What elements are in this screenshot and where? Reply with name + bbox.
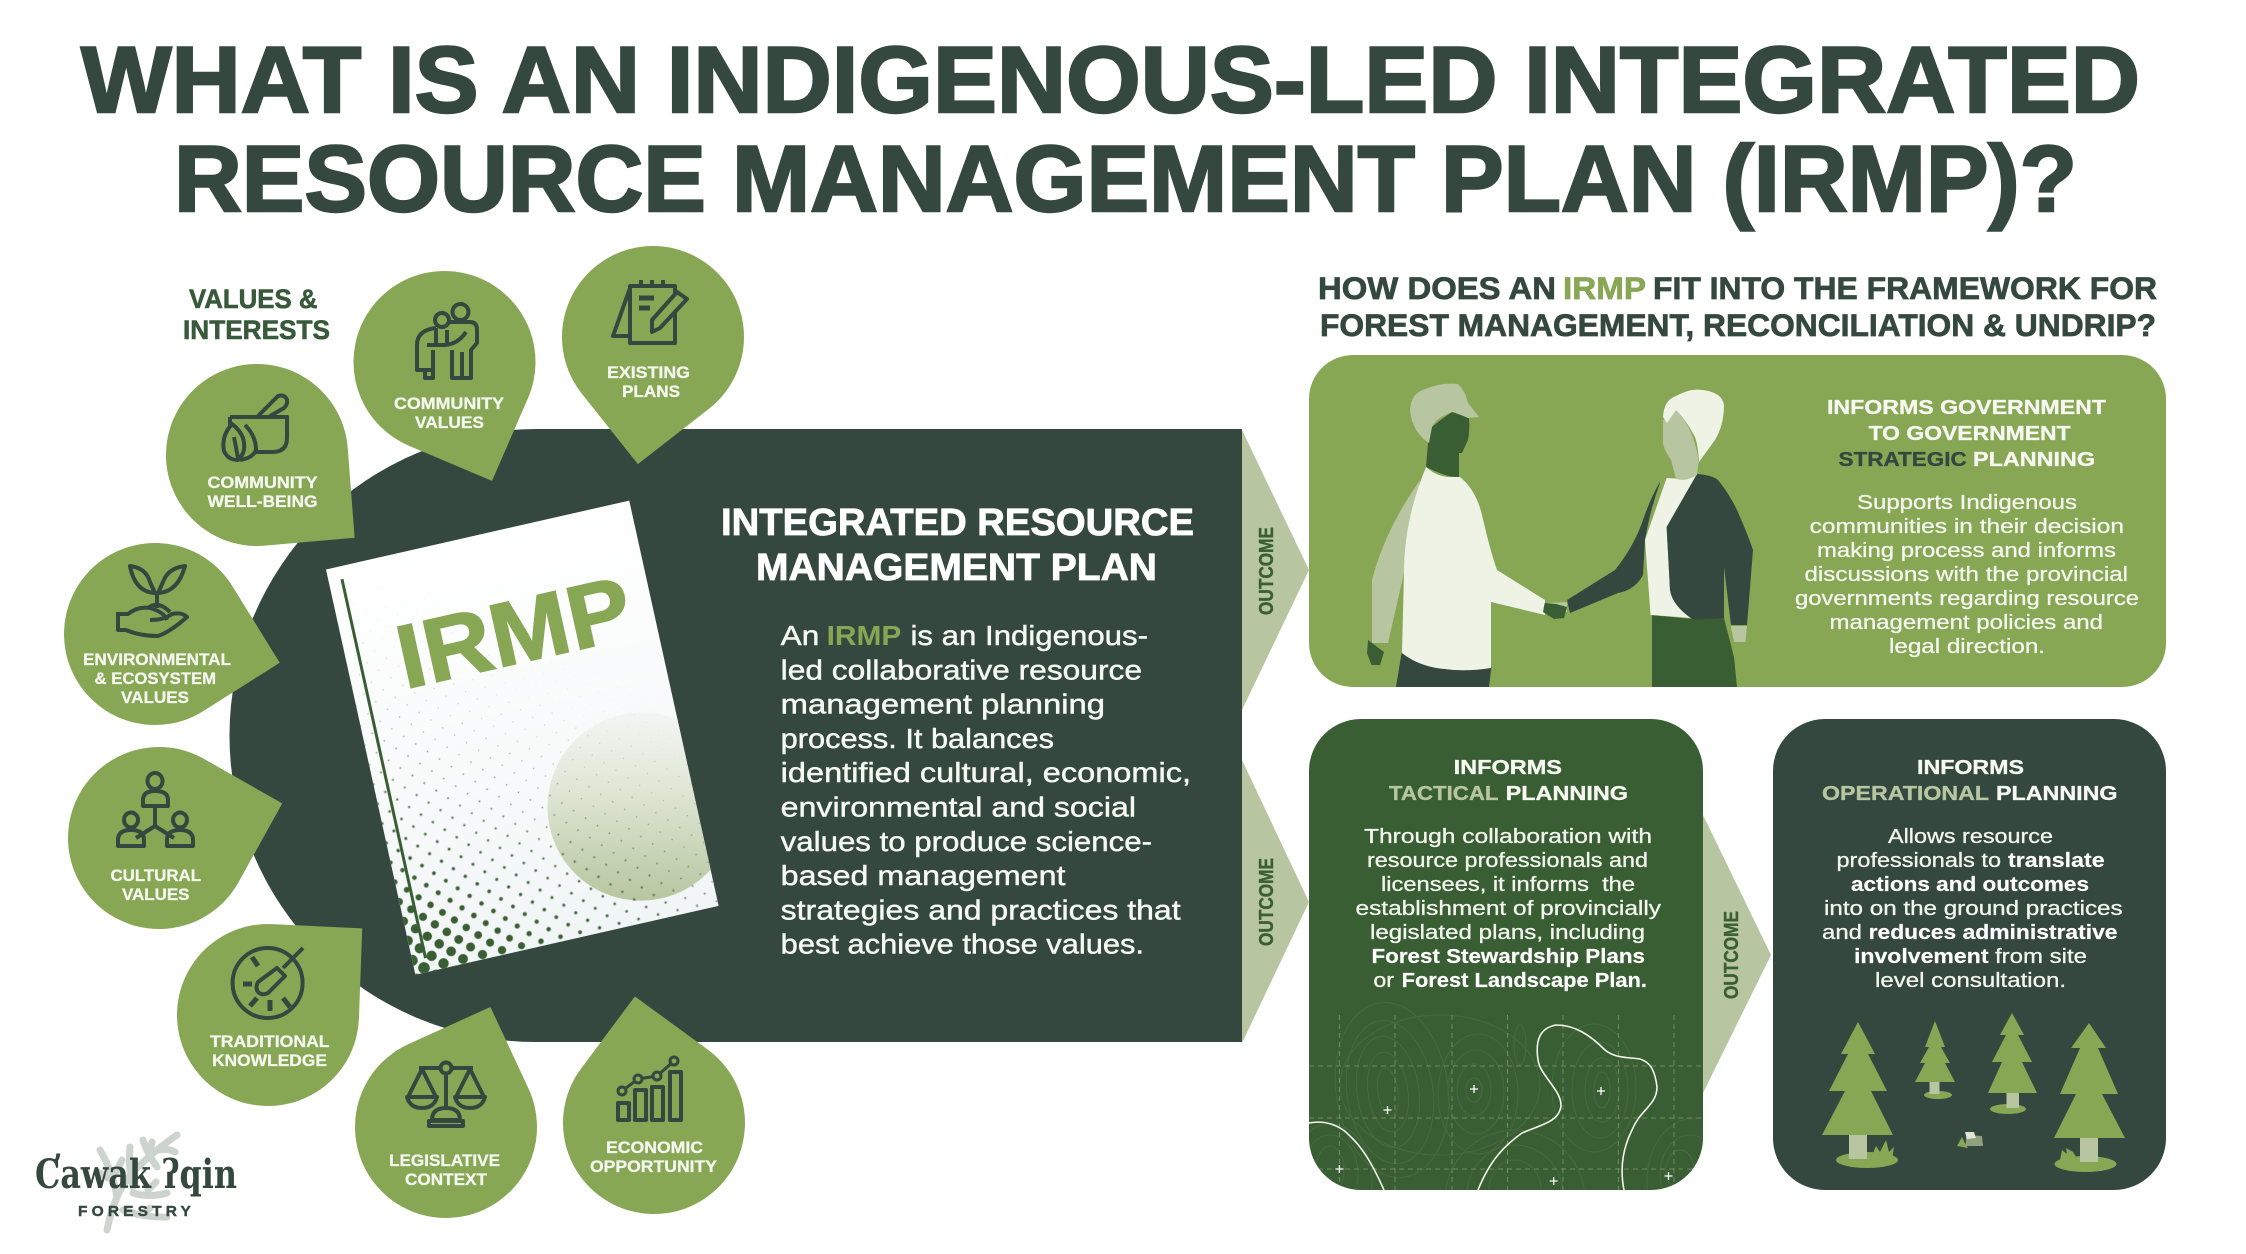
label: ENVIRONMENTAL	[83, 650, 231, 669]
label: VALUES	[122, 885, 190, 904]
panel text	[1822, 826, 2123, 992]
pin: existing plans	[547, 236, 754, 475]
panel text: reduces administrative	[1869, 922, 2118, 944]
arrow: outcome to operational planning: OUTCOME	[1721, 911, 1743, 999]
panel: government to government strategic planning	[1309, 355, 2166, 687]
panel heading	[1822, 756, 2118, 805]
central dark panel	[230, 429, 1242, 1042]
pin: community well-being	[129, 327, 413, 607]
panel heading	[1827, 396, 2107, 471]
label: WELL-BEING	[208, 492, 318, 511]
text block: IRMP description: strategies and practices that	[781, 894, 1181, 925]
panel text: discussions with the provincial	[1804, 564, 2128, 586]
panel heading: INFORMS	[1917, 756, 2024, 779]
panel heading: STRATEGIC	[1838, 448, 1967, 471]
heading: integrated resource management plan: MANAGEMENT PLAN	[756, 546, 1157, 588]
text block: IRMP description: management planning	[781, 689, 1105, 720]
label	[590, 1138, 718, 1176]
heading: values and interests	[183, 284, 330, 345]
panel text: licensees, it informs the	[1381, 874, 1635, 896]
text block: IRMP description: environmental and social	[781, 792, 1136, 822]
label	[394, 394, 505, 432]
heading: values and interests: VALUES &	[189, 284, 318, 314]
pin: environmental and ecosystem values	[46, 525, 300, 751]
icon: circle with needle	[233, 948, 303, 1018]
icon: notepad and pencil	[613, 280, 687, 343]
cover circle	[548, 718, 711, 901]
panel heading	[1389, 756, 1628, 805]
pin: community values	[326, 244, 577, 515]
label	[389, 1151, 500, 1189]
pin: cultural values	[47, 716, 307, 950]
label	[210, 1032, 330, 1070]
heading: framework question	[1318, 270, 2157, 343]
panel text: involvement	[1854, 946, 1989, 968]
icon: tree 1	[1822, 1022, 1898, 1168]
panel heading: TACTICAL	[1389, 782, 1498, 805]
map boundary lines	[1309, 1025, 1657, 1190]
panel text: level consultation.	[1875, 970, 2066, 992]
logo: Cawak Iqin Forestry	[35, 1135, 237, 1230]
panel text: actions and outcomes	[1851, 874, 2089, 896]
label: CONTEXT	[405, 1170, 488, 1189]
panel text: translate	[2008, 850, 2105, 872]
text block: IRMP description: IRMP	[827, 620, 901, 651]
text block: IRMP description	[781, 620, 1191, 960]
text block: IRMP description: best achieve those values.	[781, 929, 1144, 960]
panel text: legal direction.	[1889, 636, 2045, 658]
icon: tree 3	[1988, 1013, 2037, 1114]
map: topographic contours	[1309, 1002, 1703, 1190]
panel heading: INFORMS GOVERNMENT	[1827, 396, 2107, 419]
icon: mortar and leaves	[223, 396, 287, 460]
illustration: IRMP report cover	[326, 500, 719, 975]
panel: operational planning	[1773, 719, 2166, 1190]
label	[208, 473, 318, 511]
label: VALUES	[121, 688, 189, 707]
icon: rising bar chart	[618, 1057, 681, 1120]
panel text: Allows resource	[1888, 826, 2053, 848]
title	[81, 27, 2140, 231]
title: RESOURCE MANAGEMENT PLAN (IRMP)?	[174, 126, 2077, 231]
label: COMMUNITY	[394, 394, 505, 413]
panel text: governments regarding resource	[1795, 588, 2139, 610]
text block: IRMP description: identified cultural, economic,	[781, 757, 1191, 788]
text block: IRMP description: based management	[781, 860, 1066, 891]
icon: handshake	[1543, 602, 1567, 619]
heading: framework question: FIT INTO THE FRAMEWORK FOR	[1653, 270, 2157, 306]
heading: integrated resource management plan	[721, 501, 1194, 588]
label: EXISTING	[607, 363, 690, 382]
icon: hand with sprout	[118, 566, 187, 636]
label: OPPORTUNITY	[590, 1157, 718, 1176]
panel text: from site	[1995, 946, 2087, 968]
panel text: Forest Landscape Plan.	[1402, 970, 1647, 992]
text block: IRMP description: led collaborative resource	[781, 654, 1142, 685]
panel text: or	[1373, 970, 1394, 992]
panel text: management policies and	[1830, 612, 2103, 634]
icon: scales	[407, 1062, 485, 1126]
label: VALUES	[415, 413, 484, 432]
arrow: outcome to strategic planning	[1242, 430, 1309, 710]
heading: framework question: IRMP	[1563, 270, 1646, 306]
panel text: Through collaboration with	[1364, 826, 1652, 848]
heading: integrated resource management plan: INTEGRATED RESOURCE	[721, 501, 1194, 543]
panel: tactical planning	[1309, 719, 1703, 1190]
panel heading: TO GOVERNMENT	[1869, 422, 2071, 445]
label: & ECOSYSTEM	[94, 669, 216, 688]
label: TRADITIONAL	[210, 1032, 330, 1051]
panel text: establishment of provincially	[1356, 898, 1661, 920]
map grid	[1309, 1015, 1703, 1190]
panel heading: INFORMS	[1454, 756, 1562, 779]
panel text	[1795, 492, 2139, 658]
illustration: woman shaking hands	[1567, 390, 1753, 687]
label: PLANS	[622, 382, 680, 401]
icon: cedar branch	[98, 1135, 177, 1230]
panel text: Supports Indigenous	[1857, 492, 2077, 514]
icon: tree stump	[1957, 1132, 1983, 1148]
panel text: Forest Stewardship Plans	[1372, 946, 1645, 968]
panel heading: PLANNING	[1996, 782, 2118, 805]
panel text: resource professionals and	[1367, 850, 1648, 872]
panel heading: PLANNING	[1973, 448, 2095, 471]
label: LEGISLATIVE	[389, 1151, 500, 1170]
label: ECONOMIC	[606, 1138, 703, 1157]
title: WHAT IS AN INDIGENOUS-LED INTEGRATED	[81, 27, 2140, 132]
text block: IRMP description: process. It balances	[781, 723, 1054, 754]
logo subtitle: FORESTRY	[78, 1203, 195, 1220]
pin: traditional knowledge	[139, 861, 424, 1144]
pin: economic opportunity	[545, 983, 758, 1227]
panel text: making process and informs	[1817, 540, 2116, 562]
halftone dots	[330, 565, 718, 975]
heading: framework question: HOW DOES AN	[1318, 270, 1556, 306]
map markers	[1335, 1085, 1672, 1185]
text block: IRMP description: is an Indigenous-	[910, 620, 1148, 651]
icon: tree 4	[2054, 1023, 2125, 1172]
panel text: and	[1822, 922, 1862, 944]
label	[110, 866, 201, 904]
label: COMMUNITY	[208, 473, 318, 492]
illustration: man shaking hands	[1367, 384, 1545, 687]
heading: framework question: FOREST MANAGEMENT, RECONCILIATION & UNDRIP?	[1320, 307, 2156, 343]
icon: two people	[417, 304, 477, 378]
label: CULTURAL	[110, 866, 201, 885]
label: KNOWLEDGE	[212, 1051, 327, 1070]
arrow: outcome to tactical planning	[1242, 760, 1309, 1043]
icon: connected people	[118, 773, 193, 846]
text block: IRMP description: values to produce science-	[781, 826, 1152, 857]
logo apostrophe: ’	[52, 1147, 63, 1187]
panel heading: OPERATIONAL	[1822, 782, 1989, 805]
arrow: outcome to operational planning	[1703, 815, 1771, 1093]
panel text: into on the ground practices	[1824, 898, 2123, 920]
arrow: outcome to tactical planning: OUTCOME	[1256, 858, 1278, 946]
panel text: professionals to	[1836, 850, 2001, 872]
panel heading: PLANNING	[1506, 782, 1628, 805]
label	[607, 363, 690, 401]
label	[83, 650, 231, 707]
cover title: IRMP	[388, 558, 640, 708]
pin: legislative context	[329, 975, 576, 1244]
panel text: communities in their decision	[1810, 516, 2124, 538]
heading: values and interests: INTERESTS	[183, 315, 330, 345]
arrow: outcome to strategic planning: OUTCOME	[1256, 527, 1278, 615]
text block: IRMP description: An	[781, 620, 819, 651]
icon: tree 2	[1915, 1021, 1955, 1099]
panel text	[1356, 826, 1661, 992]
panel text: legislated plans, including	[1370, 922, 1645, 944]
spine line	[341, 579, 427, 958]
logo wordmark: Cawak ʔqin	[35, 1151, 237, 1198]
